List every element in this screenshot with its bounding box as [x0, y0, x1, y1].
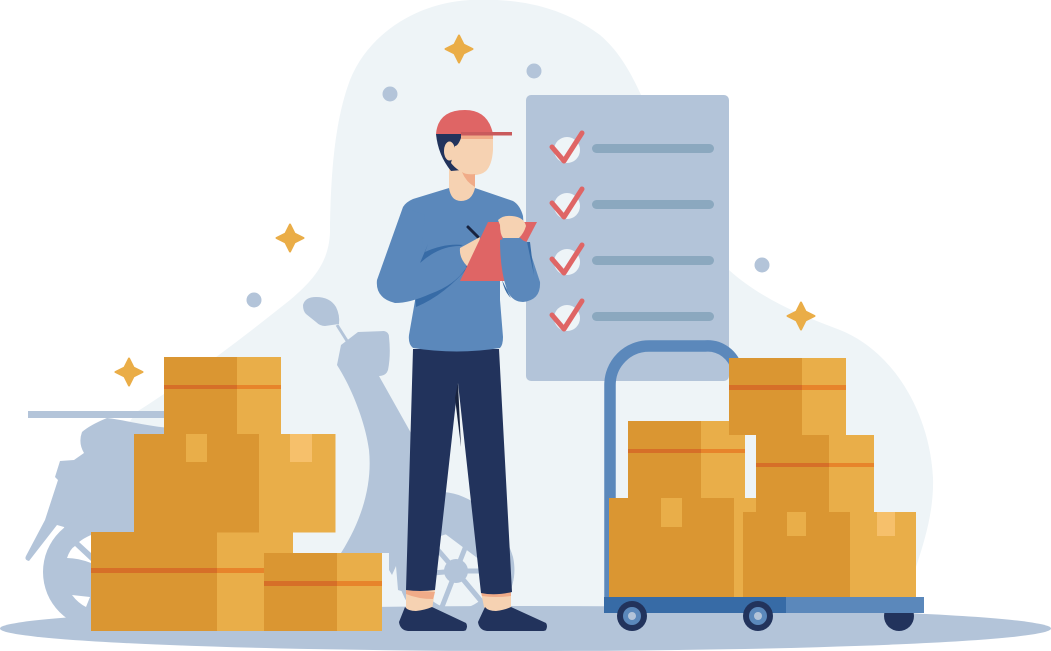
front wheel 1 [617, 601, 647, 631]
hand trolley [604, 346, 924, 631]
right arm [500, 238, 540, 302]
background blob [68, 0, 933, 612]
neck shadow [462, 172, 475, 187]
box: bottom right small [264, 553, 382, 631]
right hand [498, 216, 526, 238]
checklist row 3 [552, 245, 714, 275]
right arm shadow [527, 242, 534, 275]
neck [449, 160, 475, 201]
feet and ankles [399, 590, 547, 631]
ground shadow [0, 606, 1051, 651]
ear [444, 142, 455, 160]
checklist row 1 [552, 133, 714, 163]
checklist row 2 [552, 189, 714, 219]
box: large bottom left [91, 532, 293, 631]
trolley box: top [729, 358, 846, 435]
clipboard [460, 222, 537, 281]
box stack on trolley [609, 358, 916, 597]
trousers [406, 349, 512, 594]
left hand [460, 237, 480, 266]
decorative dots [246, 64, 770, 308]
trolley box: lower right [743, 512, 916, 597]
rear wheel [884, 601, 914, 631]
cap [436, 110, 512, 139]
scooter mirror [303, 297, 339, 326]
face [451, 136, 493, 175]
front wheel 2 [743, 601, 773, 631]
box stack left [91, 357, 382, 631]
trolley box: middle right [756, 435, 874, 512]
left arm [377, 207, 466, 303]
scooter body [337, 331, 430, 600]
trolley deck [604, 597, 924, 613]
scooter front silhouette [303, 297, 514, 619]
scooter rear silhouette [25, 411, 170, 629]
trolley box: upper left [628, 421, 745, 498]
pencil [468, 227, 478, 237]
box: top small [164, 357, 281, 434]
checklist panel [526, 95, 729, 381]
delivery man [377, 110, 547, 631]
box: middle with tabs [134, 434, 336, 532]
trolley box: lower left [609, 498, 760, 597]
scooter front wheel [408, 523, 504, 619]
trolley handle [610, 346, 737, 600]
arm folds [420, 244, 463, 263]
checklist row 4 [552, 301, 714, 331]
sparkles [116, 36, 814, 386]
hair [436, 134, 462, 171]
sweater torso [403, 188, 525, 352]
